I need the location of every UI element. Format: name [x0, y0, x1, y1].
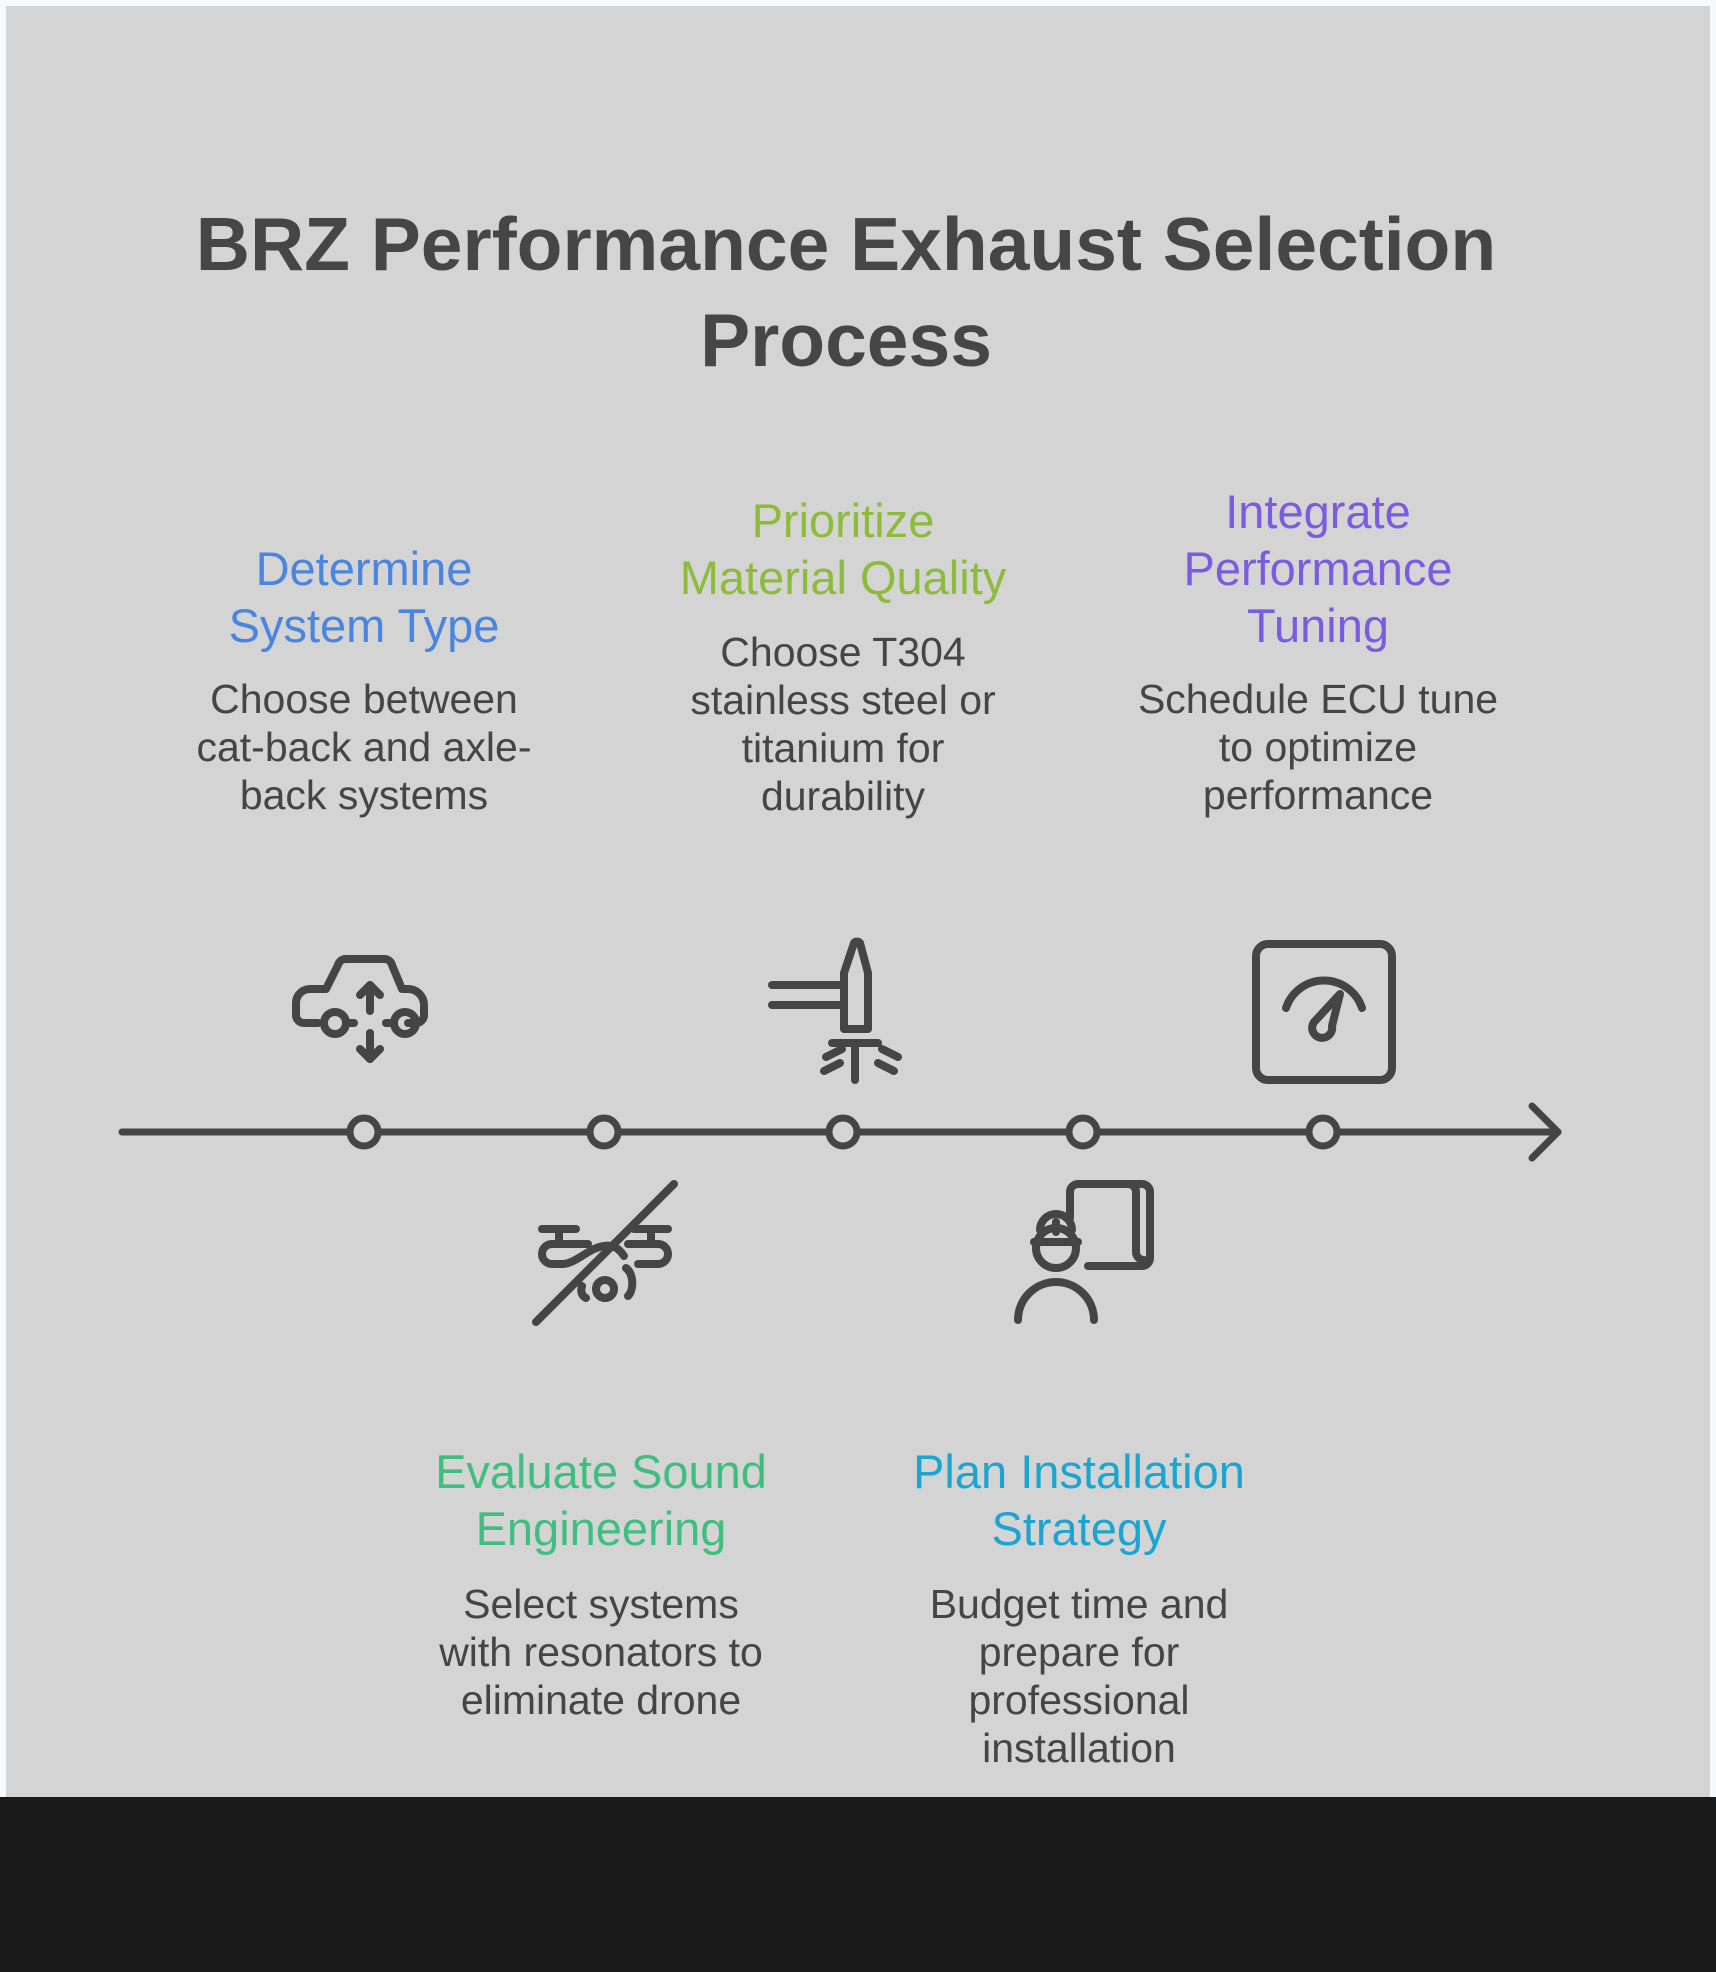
step 1 description [196, 676, 532, 818]
step 3 description: stainless steel or [690, 677, 996, 723]
icon: gauge in square [1252, 940, 1396, 1084]
step 3 description: Choose T304 [720, 629, 966, 675]
title: BRZ Performance Exhaust Selection [196, 202, 1496, 286]
step 1 description: back systems [240, 772, 488, 818]
step 3 heading: Prioritize [752, 494, 934, 547]
step 4 description: prepare for [979, 1629, 1179, 1675]
step 4 heading: Strategy [991, 1502, 1167, 1555]
step 2 description: eliminate drone [461, 1677, 741, 1723]
icon: worker with blueprint [1014, 1180, 1154, 1324]
step 2: Evaluate Sound Engineering [435, 1445, 767, 1723]
step 3 description: titanium for [742, 725, 944, 771]
step 2 heading [435, 1445, 767, 1555]
step 4 description: installation [982, 1725, 1176, 1771]
step 2 description [439, 1581, 763, 1723]
step 2 description: Select systems [463, 1581, 739, 1627]
step 5 description: performance [1203, 772, 1433, 818]
title: Process [700, 298, 992, 382]
step 5 heading: Performance [1183, 542, 1453, 595]
step 5: Integrate Performance Tuning [1138, 485, 1498, 818]
step 3 heading [680, 494, 1006, 604]
step 4 heading: Plan Installation [913, 1445, 1245, 1498]
step 1 heading: Determine [256, 542, 472, 595]
icon: drone crossed out [532, 1180, 678, 1326]
step 5 description: to optimize [1219, 724, 1417, 770]
step 3 description: durability [761, 773, 925, 819]
step 1 heading [229, 542, 499, 652]
step 1 description: Choose between [210, 676, 518, 722]
step 5 heading [1183, 485, 1453, 652]
step 5 description: Schedule ECU tune [1138, 676, 1498, 722]
step 2 heading: Engineering [476, 1502, 726, 1555]
step 5 description [1138, 676, 1498, 818]
step 4 description: professional [968, 1677, 1190, 1723]
step 2 heading: Evaluate Sound [435, 1445, 767, 1498]
step 3 description [690, 629, 996, 819]
step 4: Plan Installation Strategy [913, 1445, 1245, 1771]
step 5 heading: Tuning [1247, 599, 1389, 652]
step 3: Prioritize Material Quality [680, 494, 1006, 819]
timeline arrow with nodes [118, 1102, 1562, 1162]
step 1 description: cat-back and axle- [196, 724, 532, 770]
step 1 heading: System Type [229, 599, 499, 652]
step 5 heading: Integrate [1225, 485, 1411, 538]
step 4 description: Budget time and [930, 1581, 1228, 1627]
icon: car with up/down arrows [292, 955, 428, 1063]
step 2 description: with resonators to [439, 1629, 763, 1675]
step 4 description [930, 1581, 1228, 1771]
step 3 heading: Material Quality [680, 551, 1006, 604]
title [196, 202, 1496, 382]
step 1: Determine System Type [196, 542, 532, 818]
icon: rocket / exhaust jet [768, 938, 902, 1084]
step 4 heading [913, 1445, 1245, 1555]
